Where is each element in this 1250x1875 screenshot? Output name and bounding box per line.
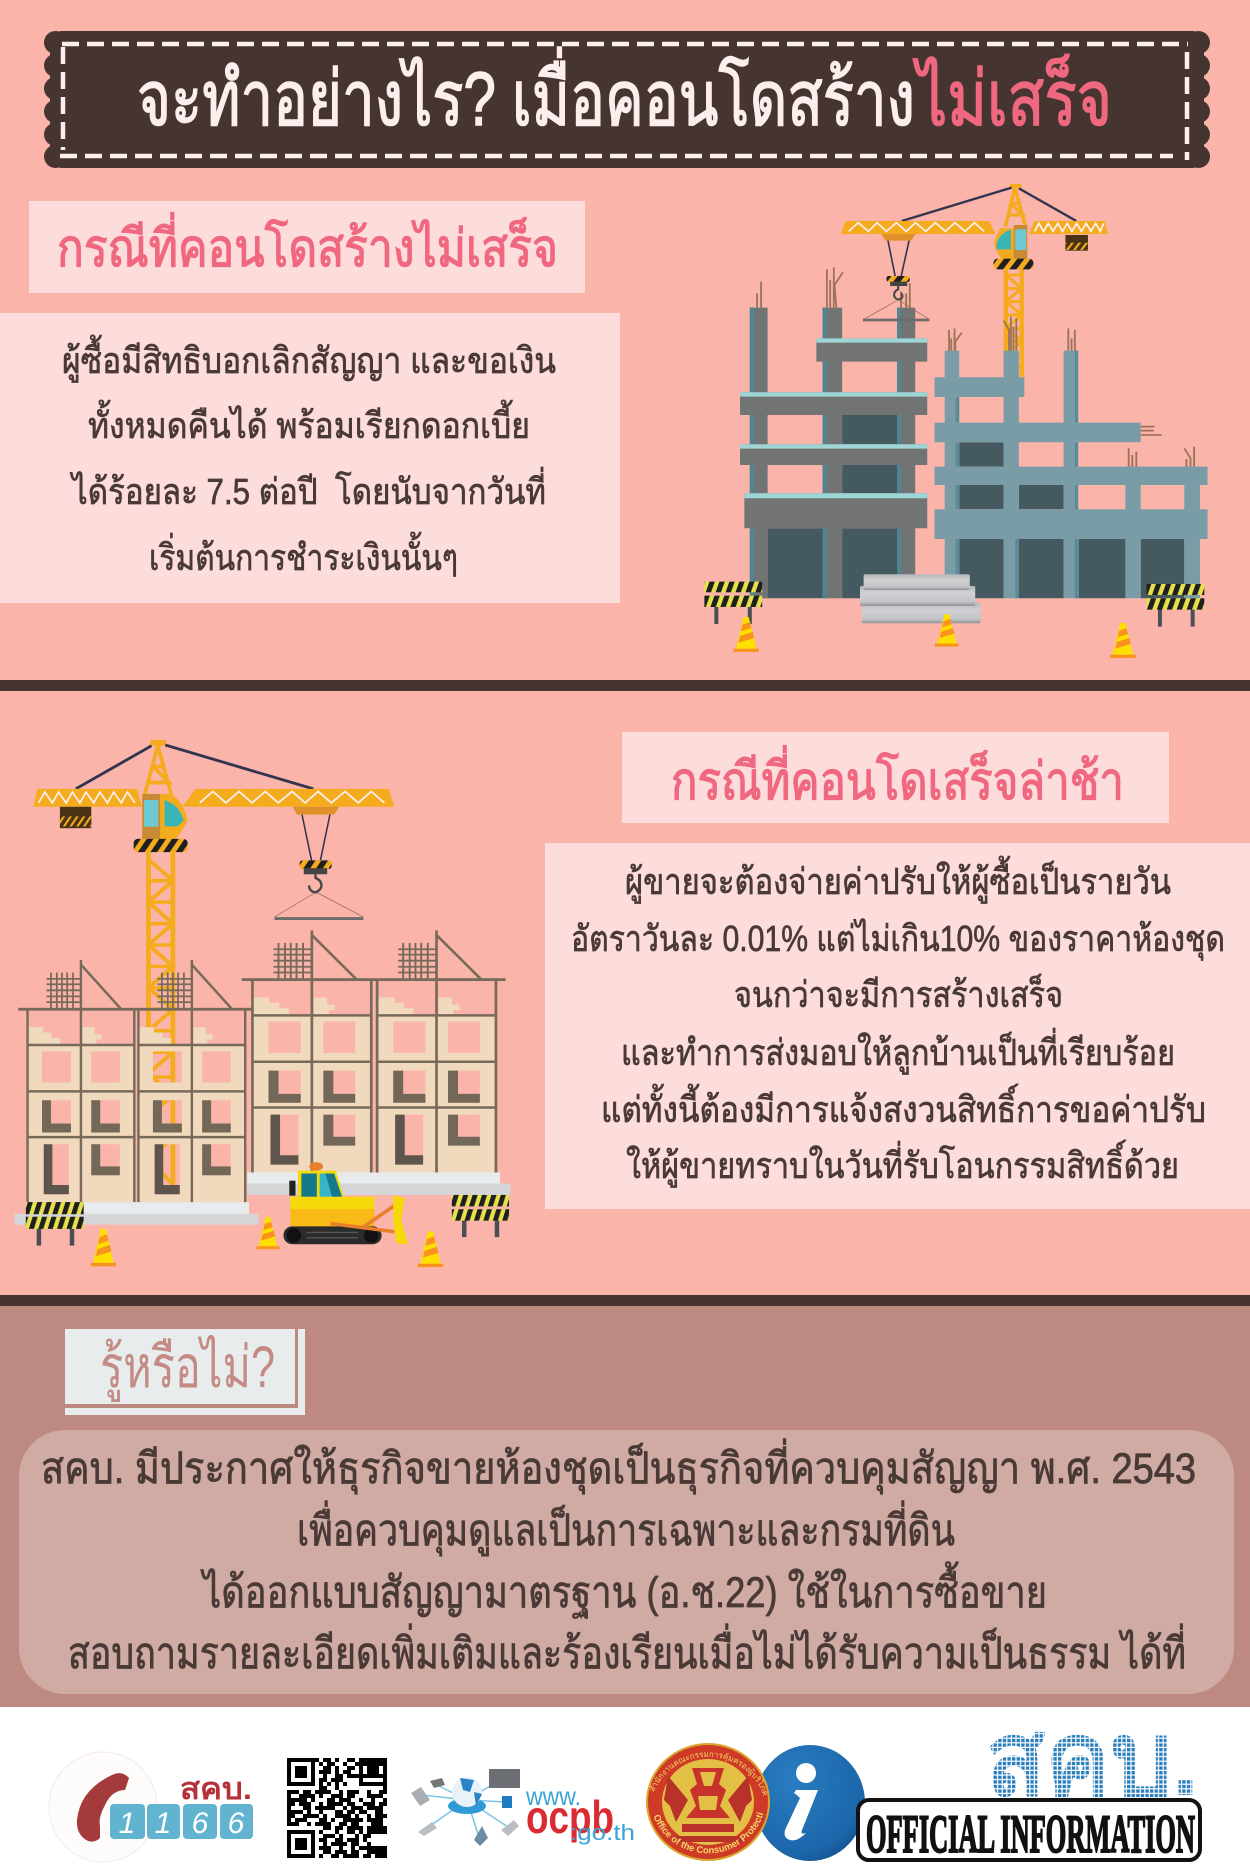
logo: official information [858,1702,1200,1864]
panel: did you know [0,1306,1250,1707]
panel: did you know: รู้หรือไม่? [100,1334,275,1402]
QR code [287,1758,387,1858]
bulldozer [283,1162,408,1244]
logo: consumer protection board seal: สำนักงานคณะกรรมการคุ้มครองผู้บริโภค [650,1752,767,1796]
panel: did you know: ได้ออกแบบสัญญามาตรฐาน (อ.ช.22) ใช้ในการซื้อขาย [200,1561,1047,1618]
divider [0,680,1250,691]
logo: consumer protection board seal: Office of the Consumer Protection Board [654,1812,764,1854]
panel: did you know: เพื่อควบคุมดูแลเป็นการเฉพาะและกรมที่ดิน [297,1501,955,1557]
logo: info circle [755,1745,865,1861]
illustration: apartment buildings, crane and bulldozer [14,740,510,1267]
traffic cone 2 [935,614,959,647]
panel: condo not finished: ได้ร้อยละ 7.5 ต่อปี โดยนับจากวันที่ [69,467,546,512]
barricade left [26,1202,84,1246]
logo: hotline 1166: สคบ. [180,1773,252,1806]
logo: hotline 1166: 6 [192,1807,209,1840]
title banner: ไม่เสร็จ [912,54,1112,142]
logo: ocpb website: :go.th [570,1820,635,1845]
logo: ocpb website [411,1769,635,1846]
logo: ocpb website: ocpb [526,1791,614,1843]
logo: hotline 1166: 1 [155,1807,171,1840]
logo: official information: สคบ. [986,1702,1199,1818]
right building: blue gray [935,317,1208,598]
logo: consumer protection board seal [646,1743,770,1861]
crane hook [863,276,929,321]
logo: ocpb website: www. [525,1783,581,1811]
logo: hotline 1166: 1 [119,1807,135,1840]
left building: gray [740,267,927,598]
crane hook [274,860,363,920]
illustration: unfinished buildings and crane [704,184,1208,658]
divider [0,1295,1250,1306]
panel: condo finished late: ผู้ขายจะต้องจ่ายค่าปรับให้ผู้ซื้อเป็นรายวัน [625,855,1171,904]
footer [0,1707,1250,1875]
concrete pipes [860,574,981,623]
panel: condo not finished: ผู้ซื้อมีสิทธิบอกเลิกสัญญา และขอเงิน [62,334,556,383]
panel: condo finished late [545,732,1250,1209]
panel: condo not finished: เริ่มต้นการชำระเงินนั้นๆ [149,531,458,578]
panel: condo finished late: จนกว่าจะมีการสร้างเสร็จ [734,972,1063,1015]
building block left [14,960,258,1225]
traffic cone 1 [91,1229,116,1266]
traffic cone 1 [733,617,759,652]
traffic cone 3 [418,1231,443,1267]
panel: condo not finished: กรณีที่คอนโดสร้างไม่เสร็จ [57,212,558,278]
logo: hotline 1166 [49,1752,253,1862]
panel: condo finished late: กรณีที่คอนโดเสร็จล่าช้า [671,745,1124,811]
barricade right [452,1195,509,1237]
traffic cone 2 [256,1217,279,1249]
title banner: จะทำอย่างไร? เมื่อคอนโดสร้าง [137,47,915,142]
barricade left [704,582,762,624]
barricade right [1146,584,1204,627]
panel: condo not finished: ทั้งหมดคืนได้ พร้อมเรียกดอกเบี้ย [88,399,530,446]
traffic cone 3 [1110,623,1136,658]
building block right [242,930,510,1195]
logo: hotline 1166: 6 [228,1807,245,1840]
title banner [44,31,1210,168]
panel: condo not finished [0,201,620,603]
